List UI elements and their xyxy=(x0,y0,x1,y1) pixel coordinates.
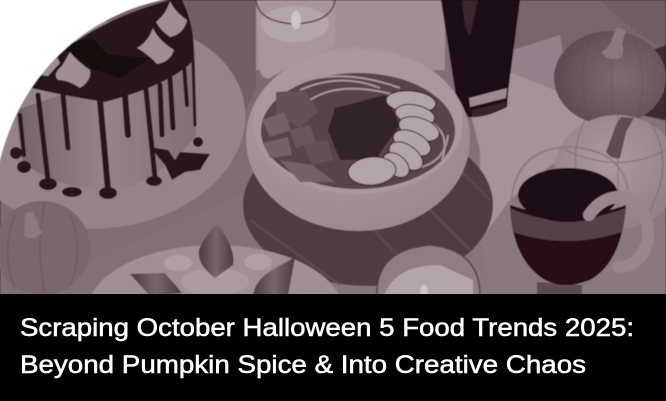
white corner cut-out xyxy=(0,0,172,168)
meringues xyxy=(38,1,187,88)
caption band xyxy=(0,294,666,401)
noodles xyxy=(300,76,448,168)
bat topper xyxy=(60,38,150,78)
strawberries xyxy=(199,224,233,278)
wine glass xyxy=(510,147,648,296)
table background xyxy=(0,0,666,296)
pumpkin: small left xyxy=(0,201,90,295)
stem xyxy=(606,117,634,158)
title xyxy=(20,314,634,379)
candle glass top xyxy=(256,0,335,78)
pumpkin: light xyxy=(554,115,666,230)
herbs xyxy=(328,95,400,160)
flame xyxy=(420,285,428,299)
soup xyxy=(261,73,455,189)
drip cake xyxy=(10,0,210,199)
title: Beyond Pumpkin Spice & Into Creative Chaos xyxy=(20,351,586,379)
title: Scraping October Halloween 5 Food Trends 2025: xyxy=(20,314,634,342)
wood board xyxy=(243,124,493,286)
flame xyxy=(291,11,301,29)
cake plate xyxy=(0,3,259,247)
radish slices xyxy=(347,89,442,187)
back paper xyxy=(250,0,445,70)
wine xyxy=(510,205,626,285)
dessert plate xyxy=(87,224,343,379)
bat decoration xyxy=(150,147,210,180)
orange peel xyxy=(589,197,648,267)
table shadow near cake xyxy=(182,0,256,120)
bottom candle glass xyxy=(377,245,480,299)
dark drink glass xyxy=(441,0,520,117)
croutons xyxy=(262,90,335,182)
table lower right xyxy=(480,200,666,296)
stem xyxy=(601,27,626,59)
pumpkin: dark orange xyxy=(554,27,666,125)
knit blanket xyxy=(510,0,666,122)
stem xyxy=(24,212,42,238)
noodle bowl xyxy=(246,47,470,231)
chocolate dots xyxy=(10,137,203,199)
glass stem xyxy=(537,282,582,296)
cloth under pumpkins xyxy=(465,70,600,296)
drips xyxy=(20,60,195,190)
